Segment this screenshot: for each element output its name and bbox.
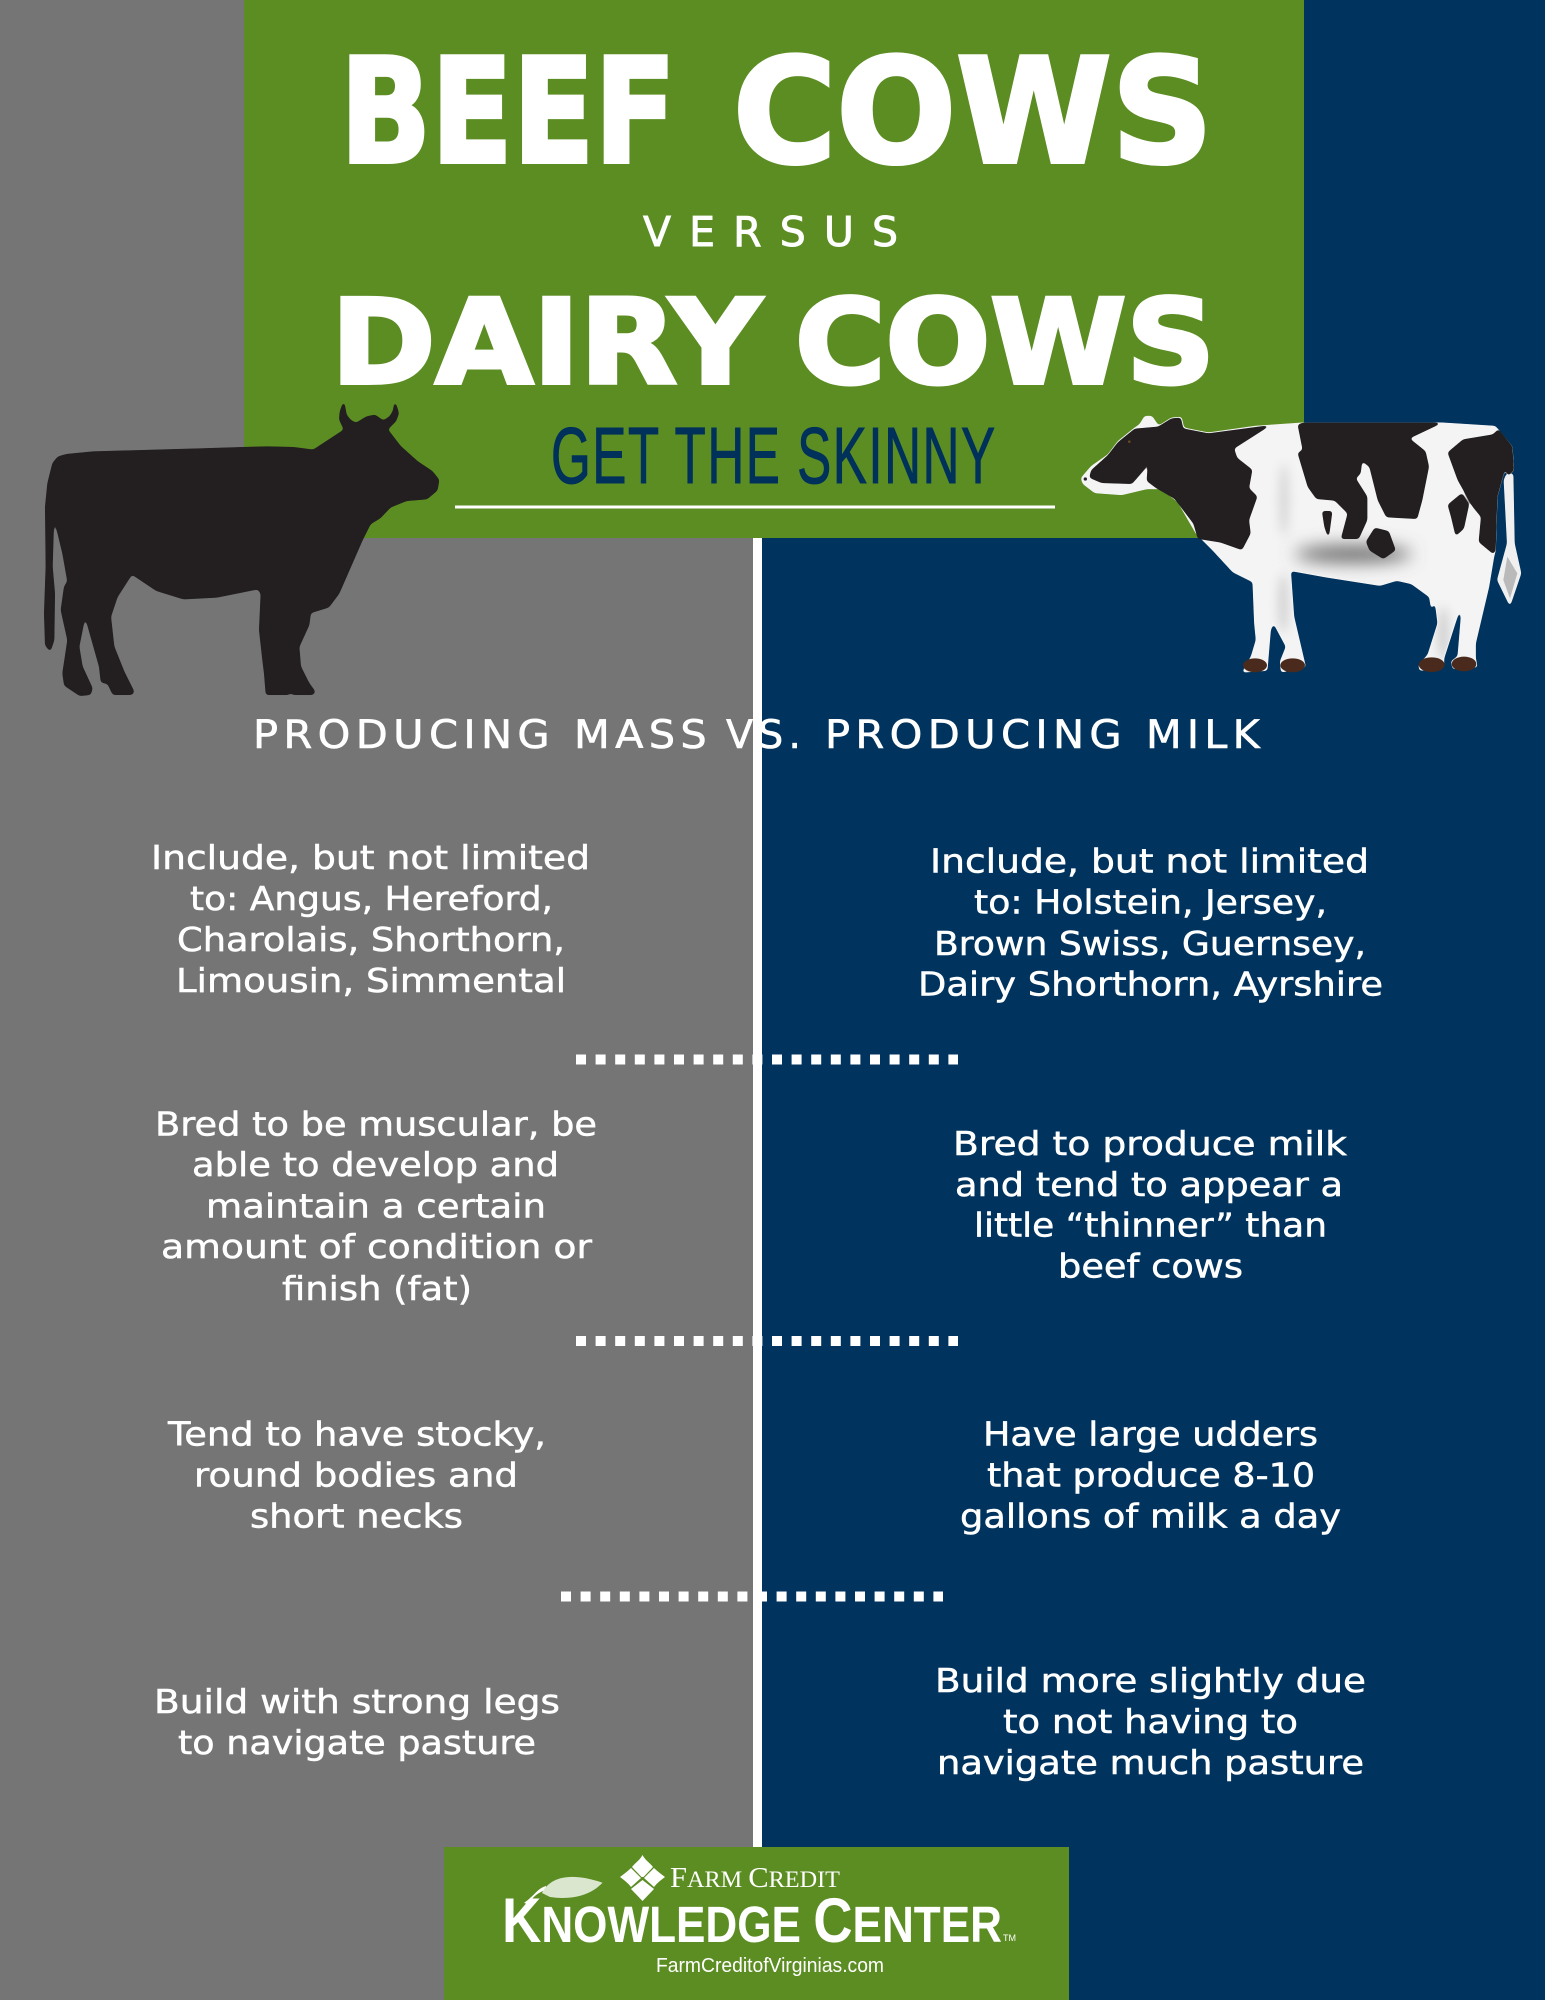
dairy row 2: bred for milk: beef cows (1058, 1246, 1243, 1286)
beef row 2: bred for muscle: Bred to be muscular, be (155, 1104, 597, 1144)
beef row 2: bred for muscle: maintain a certain (206, 1186, 546, 1226)
heading: producing mass vs producing milk: PRODUCING (825, 713, 1127, 758)
footer background (444, 1847, 1069, 2000)
heading: producing mass vs producing milk (253, 713, 1265, 758)
patch: rump (1448, 430, 1513, 553)
center divider line (753, 538, 762, 1847)
website url: FarmCreditofVirginias.com (656, 1955, 884, 1977)
dairy row 2: bred for milk: little “thinner” than (974, 1206, 1327, 1244)
beef row 1: breeds: to: Angus, Hereford, (190, 879, 553, 918)
title line: beef cows (340, 28, 1213, 197)
beef row 4: legs: to navigate pasture (178, 1723, 536, 1762)
subtitle: get the skinny: GET THE SKINNY (551, 412, 995, 501)
dairy row 2: bred for milk: Bred to produce milk (953, 1124, 1348, 1163)
title line: dairy cows: DAIRY (331, 274, 762, 411)
beef row 2: bred for muscle: amount of condition or (161, 1227, 592, 1266)
dairy row 1: breeds (918, 842, 1383, 1004)
dairy row 3: udders: that produce 8-10 (987, 1456, 1315, 1494)
panel: beef background (0, 0, 753, 2000)
beef row 3: body shape: short necks (250, 1496, 463, 1536)
dairy row 4: build: Build more slightly due (935, 1661, 1366, 1700)
dairy row 2: bred for milk (953, 1124, 1348, 1286)
spot: belly (1367, 528, 1395, 558)
dairy row 4: build: navigate much pasture (937, 1743, 1364, 1782)
beef row 3: body shape: round bodies and (194, 1456, 518, 1494)
spot: hip (1448, 494, 1468, 535)
cow hooves (1243, 657, 1476, 672)
beef row 1: breeds: Include, but not limited (151, 838, 590, 877)
title line: beef cows: COWS (733, 28, 1213, 197)
beef row 4: legs (154, 1682, 560, 1762)
dairy row 4: build (935, 1661, 1366, 1782)
patch: head, neck and shoulder (1090, 418, 1268, 549)
dairy row 4: build: to not having to (1003, 1702, 1298, 1741)
title line: dairy cows (331, 274, 1215, 411)
heading: producing mass vs producing milk: PRODUCING (253, 713, 555, 758)
beef row 2: bred for muscle (155, 1104, 597, 1308)
icon: holstein dairy cow (1082, 417, 1521, 672)
dairy row 3: udders: Have large udders (983, 1414, 1318, 1454)
panel: dairy background (753, 0, 1545, 2000)
dairy row 3: udders (960, 1414, 1341, 1536)
heading: producing mass vs producing milk: MASS (574, 713, 712, 758)
cow shading (1279, 463, 1449, 660)
dairy row 1: breeds: Brown Swiss, Guernsey, (934, 924, 1366, 963)
dairy row 3: udders: gallons of milk a day (960, 1496, 1341, 1536)
cow tail (1497, 473, 1521, 607)
trademark mark: TM (1003, 1933, 1016, 1943)
beef row 1: breeds: Limousin, Simmental (176, 961, 566, 1000)
icon: leaf (524, 1877, 602, 1904)
beef row 2: bred for muscle: able to develop and (192, 1145, 559, 1184)
footer logo panel (444, 1847, 1069, 2000)
title line: beef cows: BEEF (340, 28, 676, 197)
beef row 3: body shape: Tend to have stocky, (167, 1414, 546, 1454)
patch: middle (1298, 423, 1440, 538)
dairy row 1: breeds: Include, but not limited (930, 842, 1369, 880)
dotted divider 3 (561, 1592, 943, 1602)
spot: flank (1323, 512, 1332, 537)
heading: producing mass vs producing milk: VS. (726, 713, 806, 758)
dairy row 1: breeds: Dairy Shorthorn, Ayrshire (918, 964, 1383, 1004)
beef row 1: breeds (151, 838, 590, 1000)
beef row 1: breeds: Charolais, Shorthorn, (177, 920, 565, 959)
beef row 2: bred for muscle: finish (fat) (282, 1269, 472, 1308)
panel: header (244, 0, 1304, 538)
dairy row 1: breeds: to: Holstein, Jersey, (974, 882, 1327, 922)
beef row 4: legs: Build with strong legs (154, 1682, 560, 1721)
dotted divider 2 (576, 1336, 958, 1346)
title (331, 28, 1215, 411)
icon: black beef cow silhouette (45, 403, 438, 695)
dairy row 2: bred for milk: and tend to appear a (955, 1165, 1343, 1204)
cow black patches (1090, 418, 1513, 558)
brand: knowledge center: KNOWLEDGE CENTER (502, 1886, 1002, 1956)
heading: producing mass vs producing milk: MILK (1146, 713, 1265, 758)
subtitle underline (455, 506, 1055, 508)
brand: farm credit: FARM CREDIT (670, 1862, 840, 1894)
cow white body (1082, 417, 1513, 672)
icon: farm credit flower (620, 1855, 665, 1901)
cow eye and nose (1084, 440, 1131, 481)
beef row 3: body shape (167, 1414, 546, 1536)
title line: dairy cows: COWS (795, 274, 1215, 411)
dotted divider 1 (576, 1054, 958, 1064)
versus label: VERSUS (643, 208, 898, 256)
